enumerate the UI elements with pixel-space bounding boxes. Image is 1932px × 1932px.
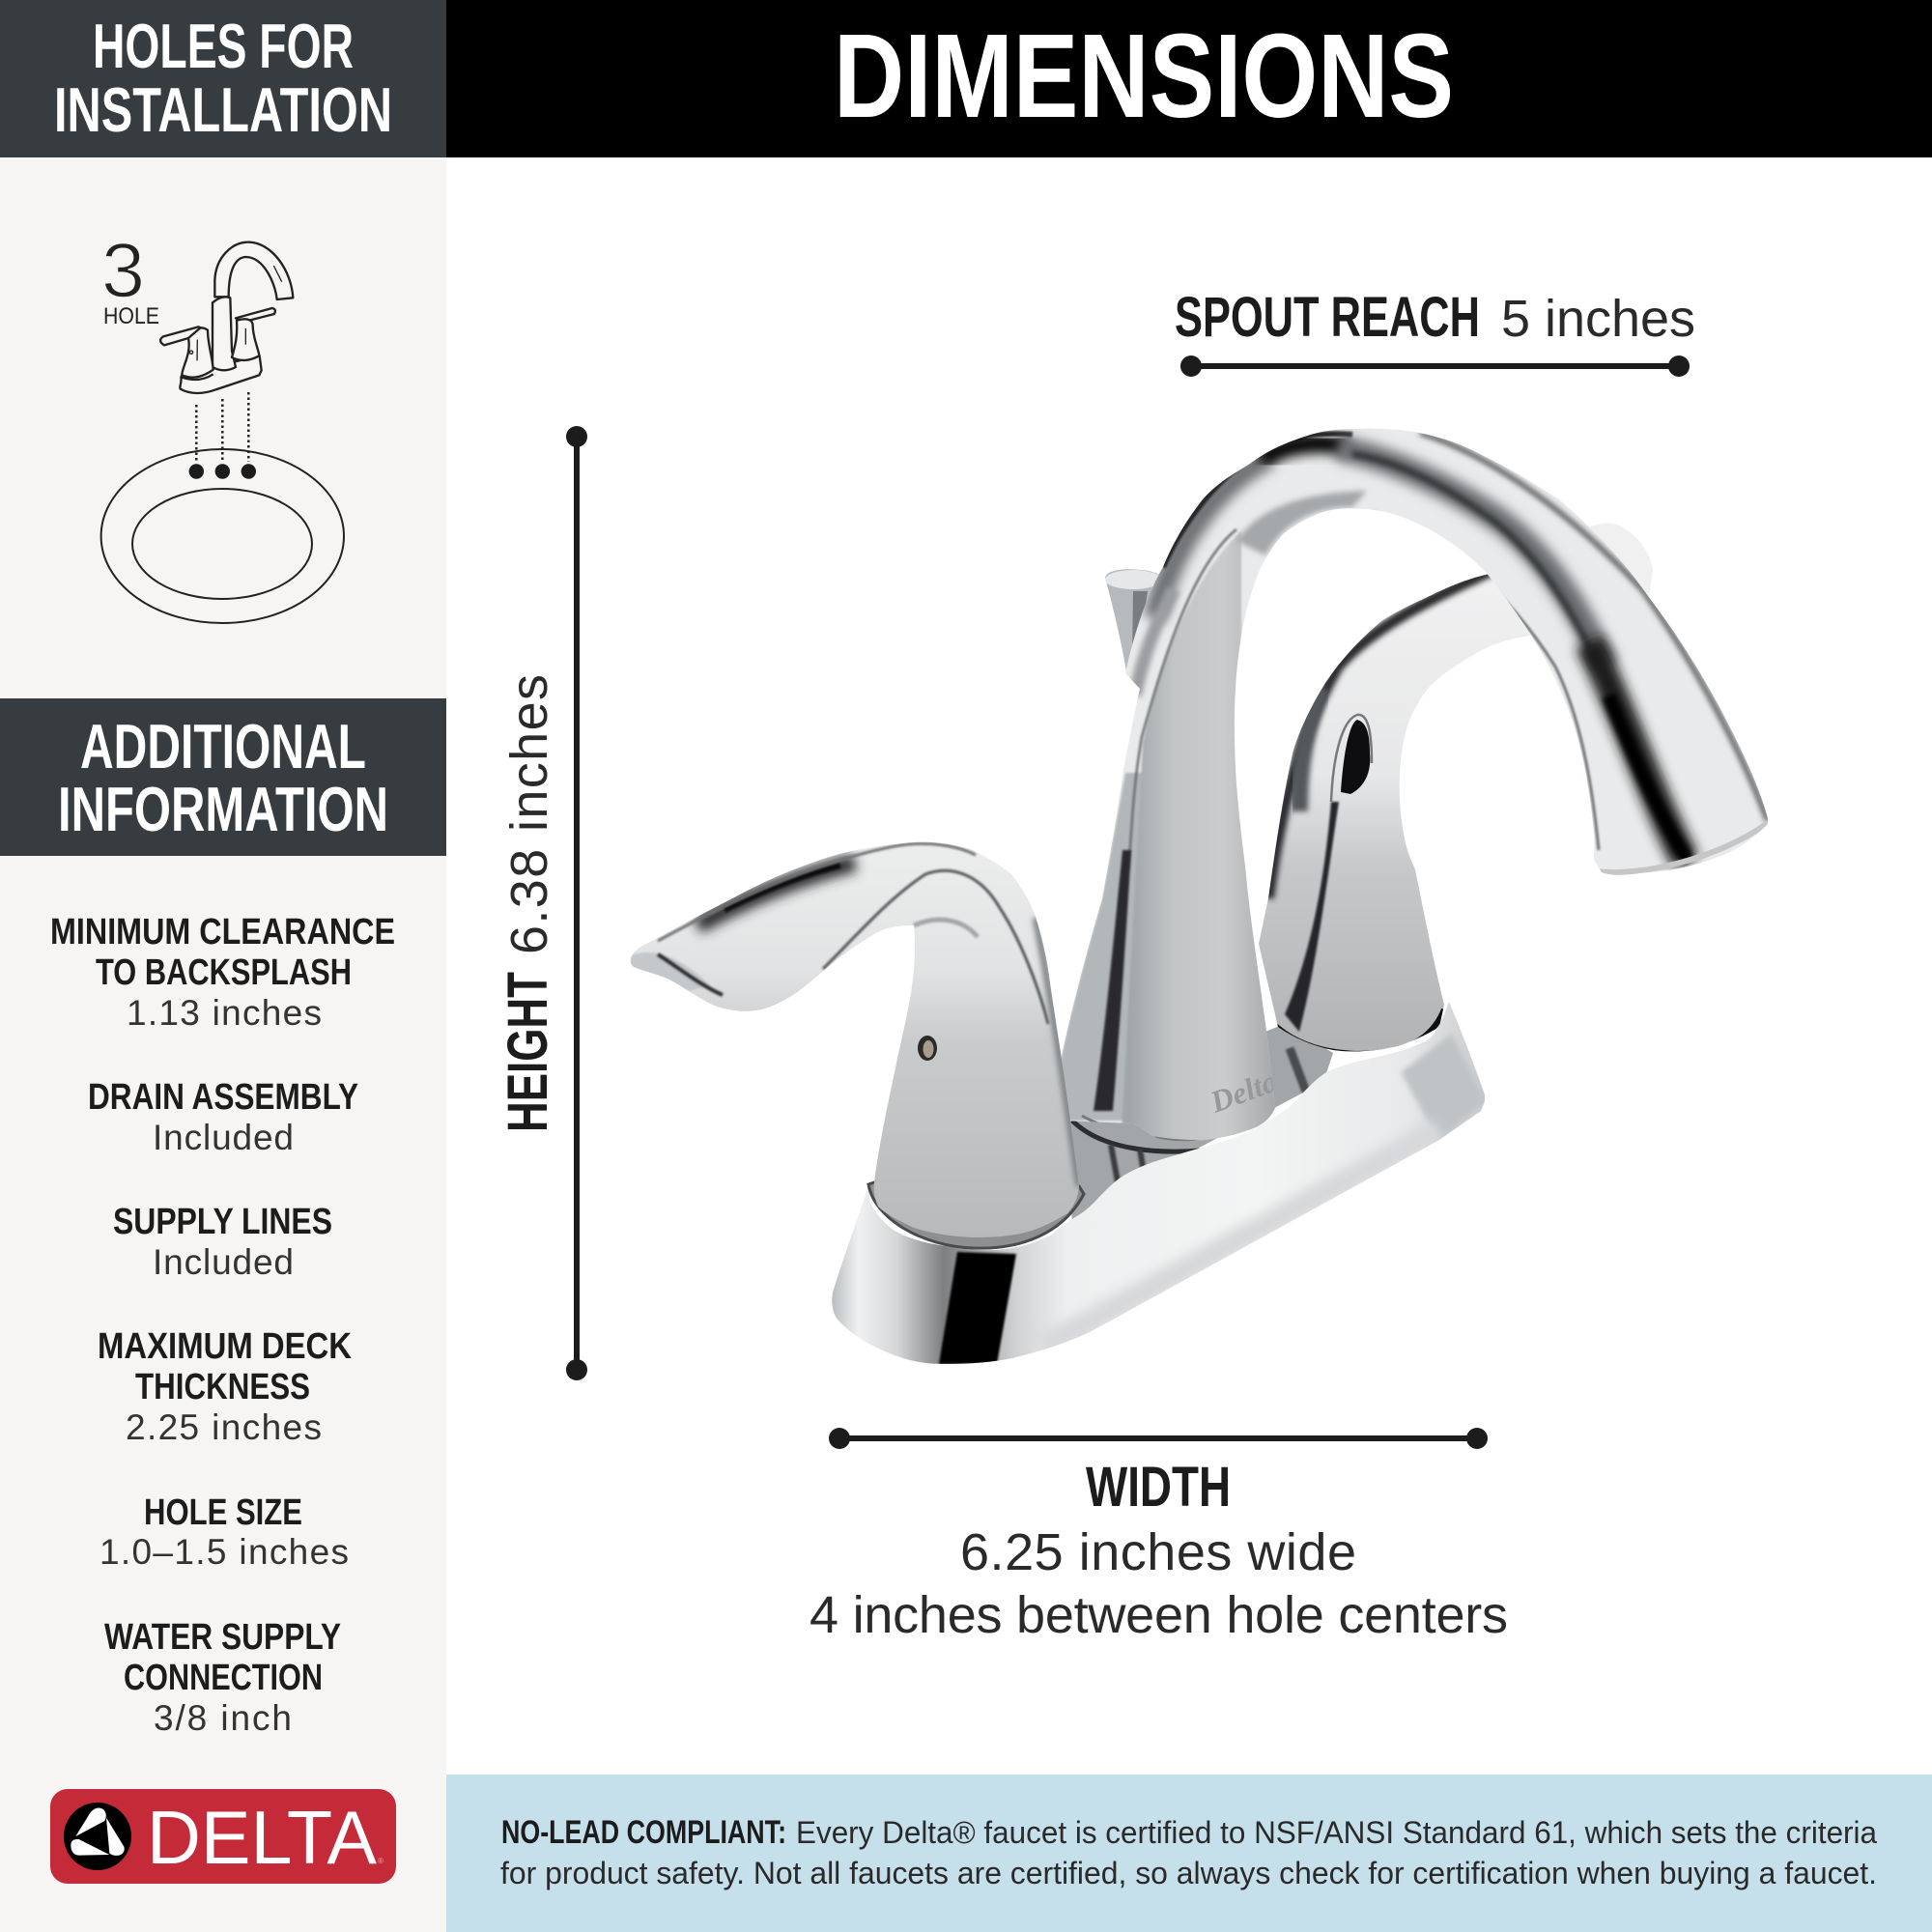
text block: maximum deck thickness: THICKNESS	[135, 1367, 310, 1407]
text block: maximum deck thickness: MAXIMUM DECK	[98, 1326, 352, 1367]
icon: faucet line drawing	[160, 242, 293, 393]
dimension: height	[497, 426, 587, 1380]
faucet central body and spout	[1061, 429, 1768, 1150]
icon: sink bowl with holes	[101, 449, 344, 623]
label: 3 hole: HOLE	[103, 303, 159, 329]
faucet right handle	[1259, 524, 1653, 1054]
label: 3 hole: 3	[101, 227, 145, 313]
dimension: spout reach: SPOUT REACH	[1175, 286, 1480, 349]
text block: minimum clearance: 1.13 inches	[127, 993, 322, 1033]
handle seating ring	[868, 1182, 1084, 1248]
heading: holes for installation	[0, 0, 446, 157]
text block: supply lines: SUPPLY LINES	[113, 1202, 332, 1242]
faucet set-screw hole	[918, 1036, 937, 1061]
text block: supply lines: Included	[153, 1242, 294, 1282]
heading: holes for installation: INSTALLATION	[54, 74, 392, 145]
title: dimensions: DIMENSIONS	[834, 11, 1454, 143]
panel: left sidebar background	[0, 0, 446, 1932]
dimension: spout reach	[1175, 286, 1695, 377]
heading: additional information: INFORMATION	[58, 774, 388, 844]
text block: minimum clearance: MINIMUM CLEARANCE	[50, 912, 395, 952]
faucet left handle	[628, 842, 1084, 1248]
dimension: width	[810, 1428, 1508, 1644]
heading: additional information	[0, 698, 446, 856]
text block: minimum clearance: TO BACKSPLASH	[96, 952, 352, 993]
diagram: 3 hole installation	[101, 227, 344, 623]
faucet popup stem	[1105, 569, 1165, 676]
faucet neck reflections	[1063, 1024, 1333, 1222]
text block: drain assembly: DRAIN ASSEMBLY	[88, 1077, 358, 1118]
text block: water supply connection: CONNECTION	[124, 1658, 323, 1698]
heading: additional information: ADDITIONAL	[80, 711, 366, 781]
text block: drain assembly	[88, 1077, 358, 1157]
callout: no-lead compliant: for product safety. Not all faucets are certified, so always check for certification when buying a faucet.	[500, 1856, 1877, 1890]
text block: water supply connection: 3/8 inch	[154, 1698, 292, 1738]
dimension: width: 6.25 inches wide	[960, 1523, 1356, 1581]
text block: drain assembly: Included	[153, 1118, 294, 1157]
text block: maximum deck thickness: 2.25 inches	[126, 1407, 322, 1447]
text block: hole size	[99, 1492, 349, 1572]
text block: hole size: 1.0–1.5 inches	[99, 1532, 349, 1572]
dimension: spout reach: 5 inches	[1501, 290, 1695, 348]
text block: minimum clearance	[50, 912, 395, 1033]
faucet base	[832, 1002, 1485, 1364]
delta engraving: Delta	[1205, 1063, 1282, 1120]
dimension: width: 4 inches between hole centers	[810, 1586, 1508, 1644]
logo: delta: DELTA	[147, 1795, 377, 1880]
label: 3 hole	[101, 227, 159, 329]
heading: holes for installation: HOLES FOR	[93, 11, 354, 81]
text block: water supply connection	[104, 1617, 341, 1738]
text block: hole size: HOLE SIZE	[144, 1492, 302, 1533]
dimension: height: 6.38 inches	[500, 674, 558, 954]
icon: dotted guide lines	[196, 392, 248, 462]
dimension: height: HEIGHT	[497, 972, 559, 1132]
logo: delta: ®	[378, 1857, 384, 1865]
callout: no-lead compliant: NO-LEAD COMPLIANT:	[501, 1814, 786, 1851]
callout: no-lead compliant	[446, 1775, 1932, 1932]
text block: maximum deck thickness	[98, 1326, 352, 1447]
text block: water supply connection: WATER SUPPLY	[104, 1617, 341, 1658]
logo: delta	[50, 1789, 396, 1884]
illustration: chrome faucet	[628, 429, 1768, 1364]
title: dimensions	[446, 0, 1932, 157]
callout: no-lead compliant: Every Delta® faucet is certified to NSF/ANSI Standard 61, which sets the criteria	[796, 1815, 1877, 1850]
text block: supply lines	[113, 1202, 332, 1282]
dimension: width: WIDTH	[1086, 1456, 1231, 1519]
